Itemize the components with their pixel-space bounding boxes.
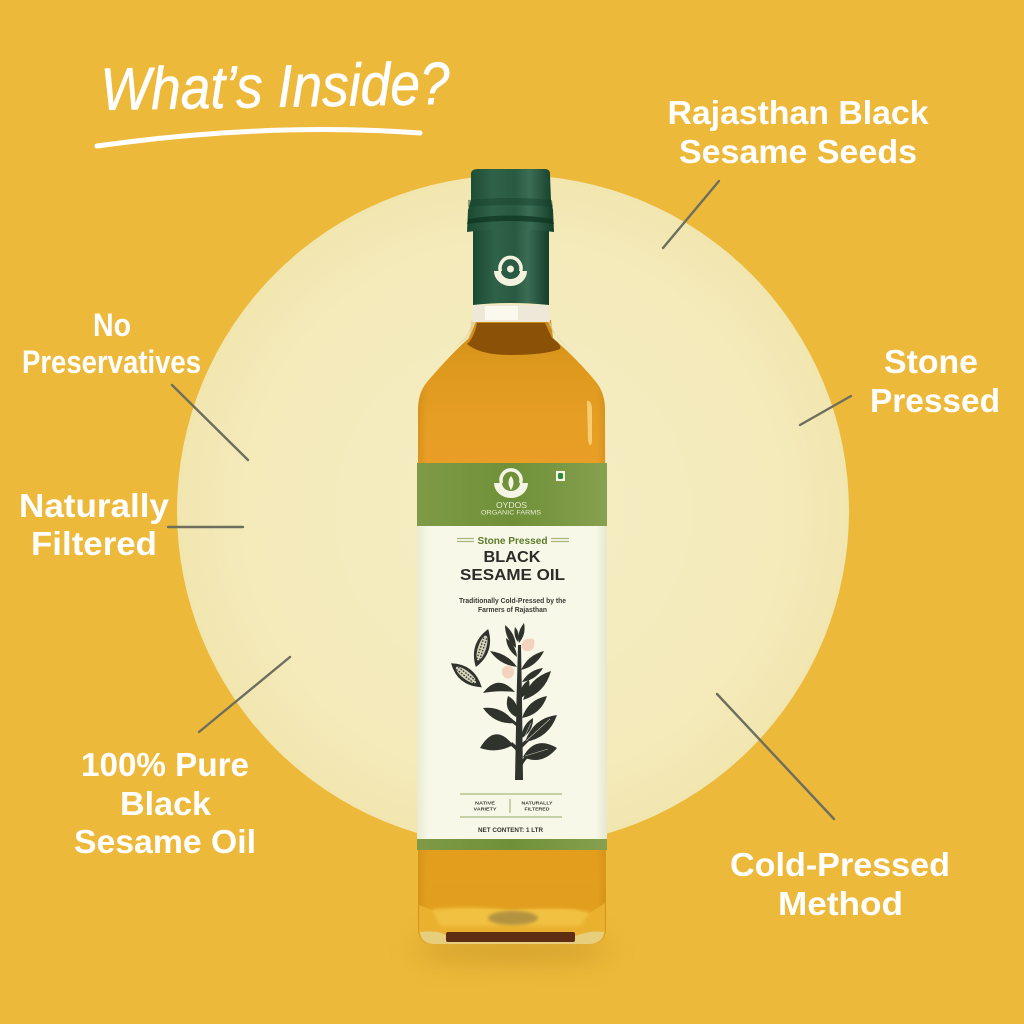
label attribute: native variety: VARIETY — [474, 806, 497, 812]
label: 100% Pure Black Sesame Oil: Sesame Oil — [74, 823, 256, 860]
clear neck ring — [472, 305, 550, 322]
highlight on glass — [587, 401, 592, 446]
label: Rajasthan Black Sesame Seeds: Rajasthan Black — [668, 94, 929, 131]
label: Cold-Pressed Method: Method — [778, 885, 903, 922]
label attribute: naturally filtered: NATURALLY — [522, 800, 553, 806]
bottle ground shadow — [412, 938, 612, 962]
icon: neck logo — [494, 257, 527, 286]
product name — [460, 549, 565, 584]
label: 100% Pure Black Sesame Oil: 100% Pure — [81, 746, 249, 783]
brand name: OYDOS — [496, 500, 527, 510]
bottle — [417, 169, 607, 944]
label: Naturally Filtered: Filtered — [31, 525, 157, 562]
label attribute: naturally filtered — [522, 800, 553, 812]
tagline — [459, 598, 566, 614]
stone pressed heading — [457, 535, 569, 547]
brand name: ORGANIC FARMS — [481, 510, 542, 516]
leaves — [480, 734, 513, 750]
label: 100% Pure Black Sesame Oil — [74, 746, 256, 860]
tagline: Farmers of Rajasthan — [478, 607, 547, 614]
plant stem — [515, 645, 523, 780]
label green header — [417, 463, 607, 527]
glass body and oil — [418, 320, 606, 944]
label: Stone Pressed — [870, 343, 1000, 419]
tagline: Traditionally Cold-Pressed by the — [459, 598, 566, 605]
label: No Preservatives — [22, 307, 201, 380]
product name: BLACK — [484, 549, 541, 566]
label attribute: native variety — [474, 800, 497, 812]
title: What's Inside?: What’s Inside? — [100, 50, 451, 123]
label: 100% Pure Black Sesame Oil: Black — [120, 785, 212, 822]
plant illustration — [447, 623, 557, 780]
label: Naturally Filtered — [19, 487, 170, 562]
bottle base glass — [419, 903, 605, 943]
leaf veins — [525, 719, 550, 756]
icon: veg mark — [556, 471, 565, 481]
seed pod upper — [469, 627, 495, 669]
label attribute: naturally filtered: FILTERED — [524, 806, 550, 812]
label: Rajasthan Black Sesame Seeds — [668, 94, 929, 170]
label green footer band — [417, 839, 607, 850]
label cream panel — [417, 526, 607, 839]
net content: NET CONTENT: 1 LTR — [478, 827, 543, 834]
label: Stone Pressed: Pressed — [870, 382, 1000, 419]
dark oil at shoulder — [467, 323, 560, 355]
label: Cold-Pressed Method — [730, 846, 950, 922]
label: Stone Pressed: Stone — [884, 343, 978, 380]
label: Naturally Filtered: Naturally — [19, 487, 170, 524]
label bottom rules — [460, 794, 562, 817]
label attribute: native variety: NATIVE — [475, 800, 496, 806]
product name: SESAME OIL — [460, 567, 565, 584]
label: Rajasthan Black Sesame Seeds: Sesame Seeds — [679, 133, 917, 170]
flowers — [502, 637, 537, 678]
label: No Preservatives: No — [93, 307, 131, 343]
label: Cold-Pressed Method: Cold-Pressed — [730, 846, 950, 883]
callout lines — [168, 181, 851, 819]
title: What's Inside? — [97, 50, 451, 146]
green cap — [473, 220, 549, 305]
title underline — [97, 130, 420, 146]
label: No Preservatives: Preservatives — [22, 344, 201, 380]
seed pod lower — [447, 658, 486, 693]
brand name — [481, 500, 542, 516]
pale circle backdrop — [177, 175, 849, 847]
stone pressed heading: Stone Pressed — [478, 535, 548, 547]
icon: label logo — [494, 470, 528, 498]
